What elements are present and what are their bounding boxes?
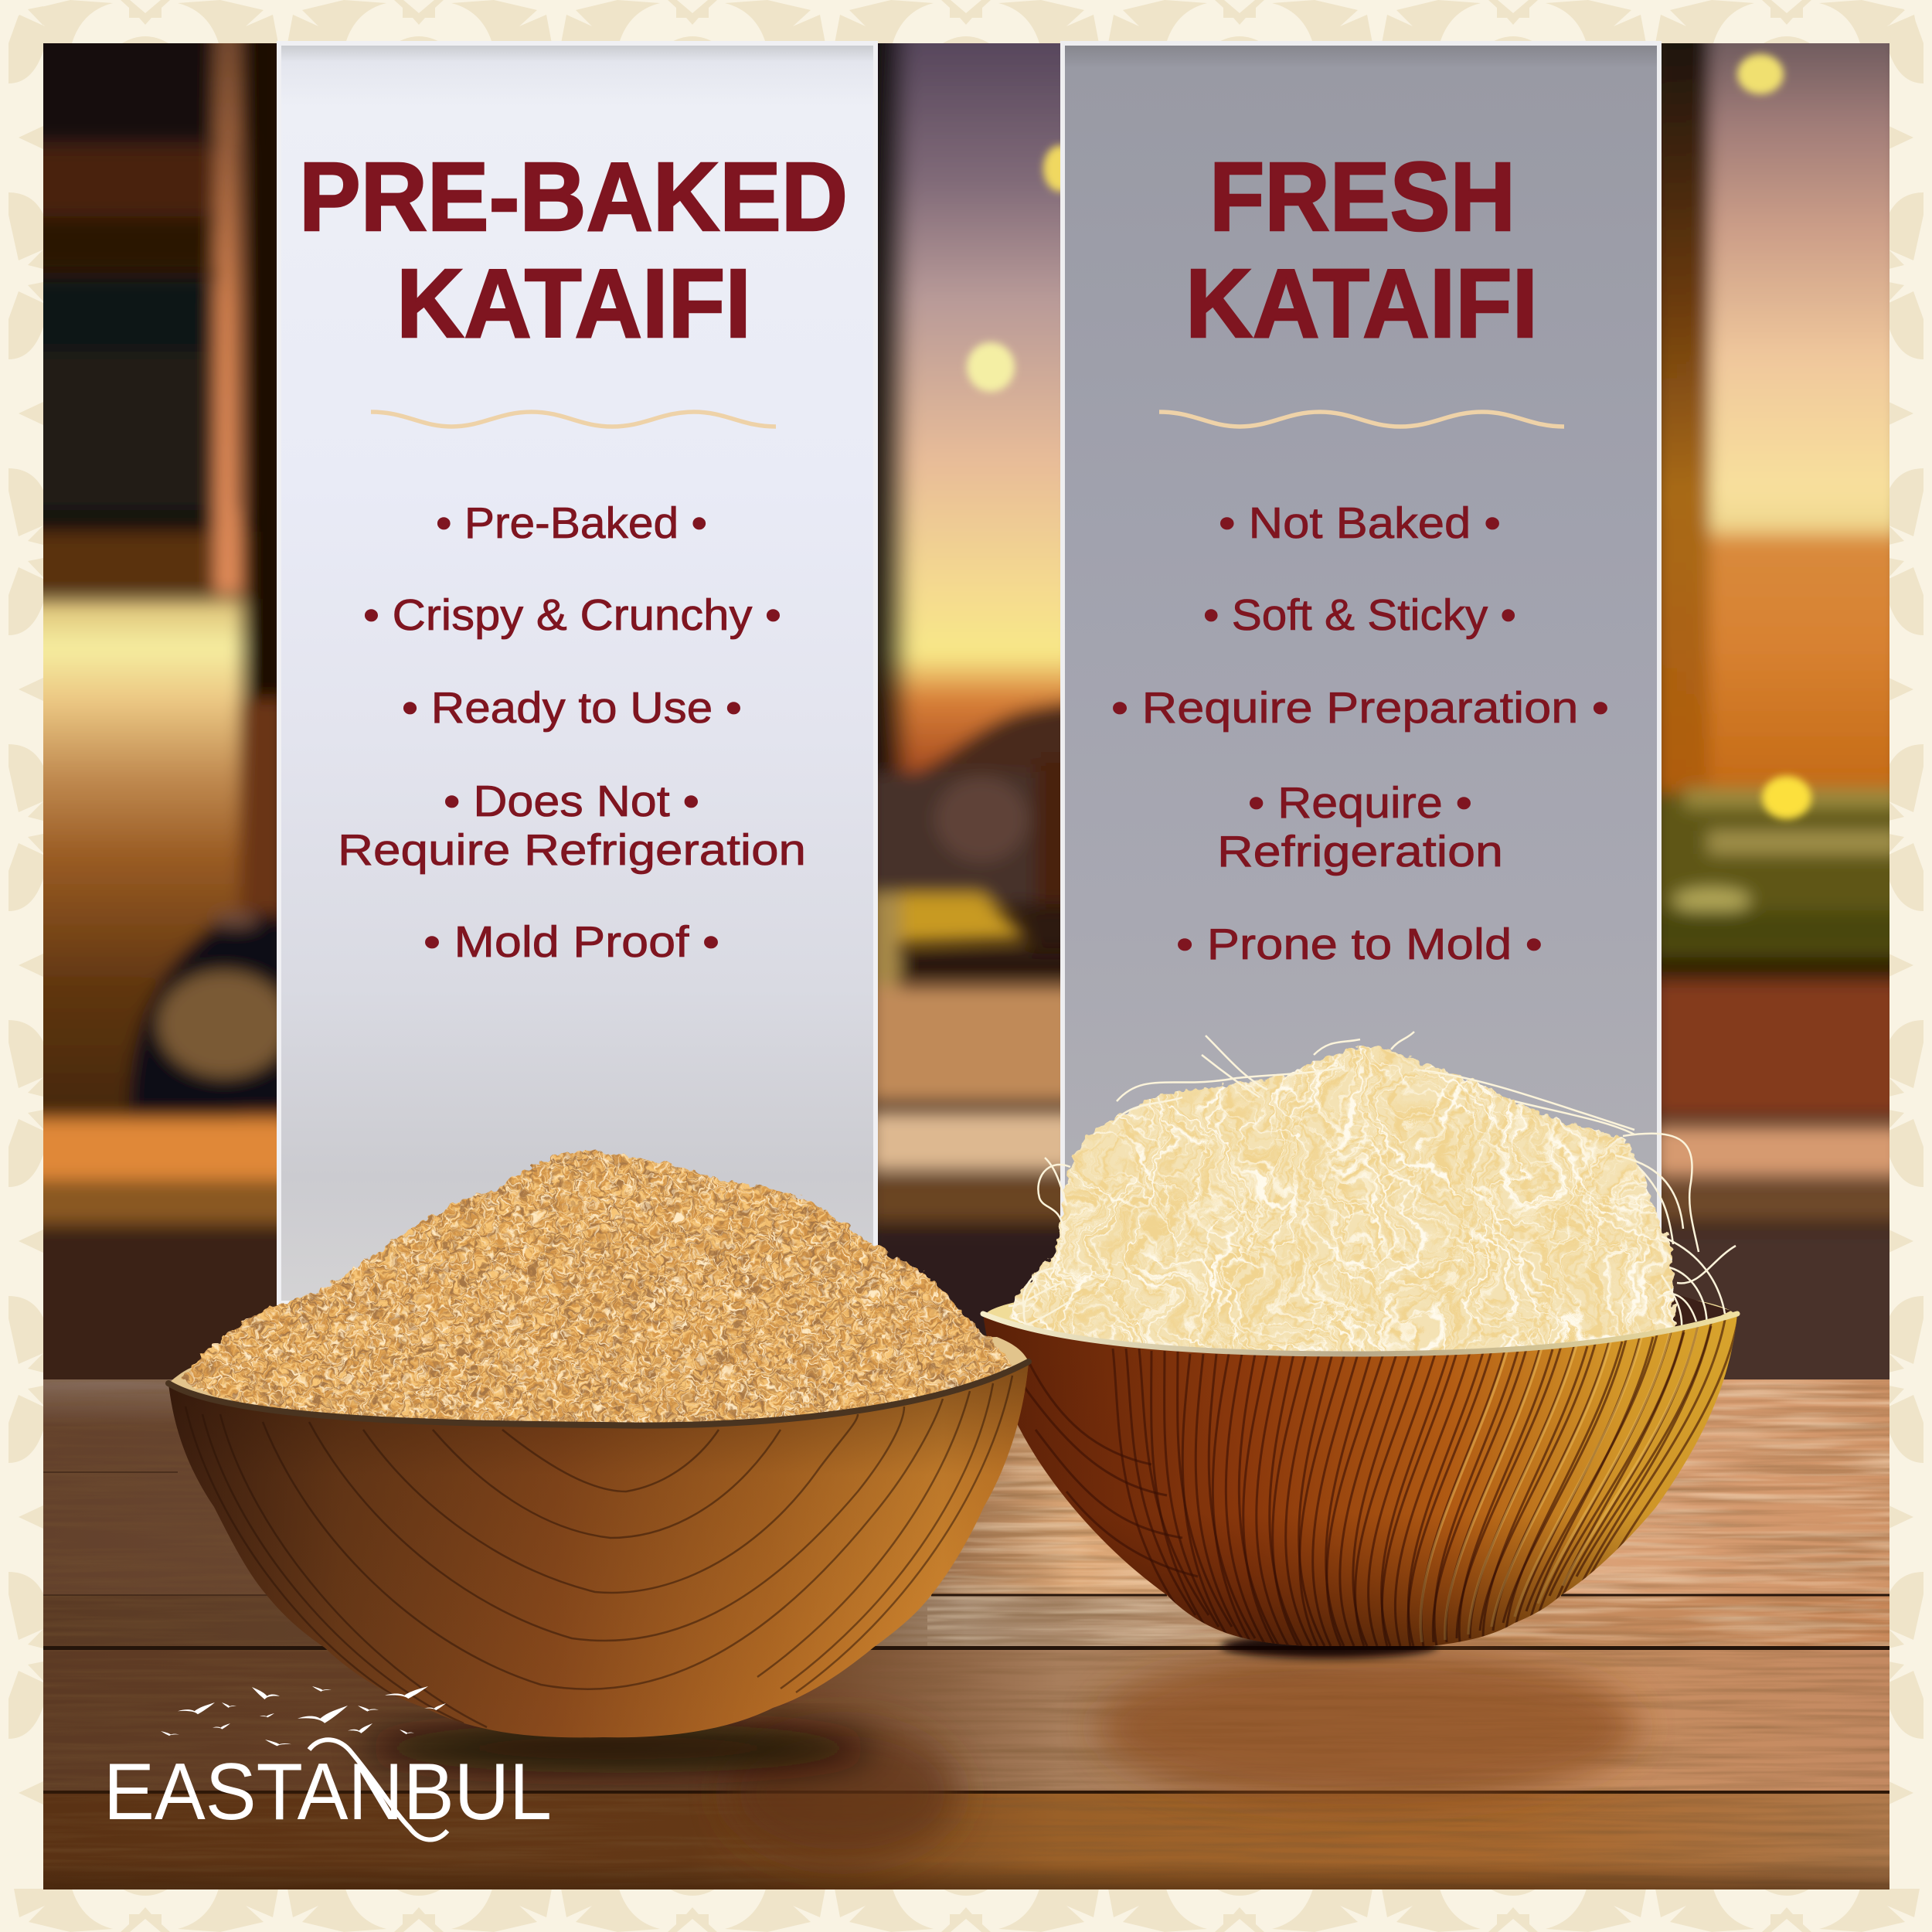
bowl interior rim <box>168 1337 1029 1424</box>
logo: Eastanbul <box>104 1686 552 1840</box>
pre-baked kataifi pile <box>0 662 1226 1904</box>
right bowl with fresh kataifi <box>980 1031 1740 1646</box>
heading: pre-baked kataifi: PRE-BAKED <box>299 142 848 251</box>
heading: fresh kataifi <box>1185 142 1538 358</box>
list: fresh features <box>1111 498 1609 969</box>
bowl body <box>983 1314 1738 1646</box>
list: fresh features: • Require Preparation • <box>1111 683 1609 733</box>
wavy divider <box>1159 412 1564 427</box>
list: fresh features: • Prone to Mold • <box>1176 920 1543 969</box>
list: fresh features: • Soft & Sticky • <box>1203 590 1516 640</box>
list: fresh features: Refrigeration <box>1217 827 1503 876</box>
left bowl with pre-baked kataifi <box>165 1150 1032 1737</box>
wavy divider <box>371 412 776 427</box>
bowl rim highlight <box>168 1362 1029 1426</box>
list: pre-baked features: • Ready to Use • <box>402 683 742 733</box>
heading: pre-baked kataifi: KATAIFI <box>396 249 751 358</box>
bowl shadows on table <box>363 1634 1638 1862</box>
heading: fresh kataifi: KATAIFI <box>1185 249 1538 358</box>
list: pre-baked features: • Mold Proof • <box>423 917 719 967</box>
fresh kataifi noodles <box>1009 1031 1736 1351</box>
list: pre-baked features <box>338 498 806 967</box>
bowl body <box>168 1362 1029 1737</box>
list: pre-baked features: • Crispy & Crunchy • <box>363 590 781 640</box>
wooden table <box>43 1379 1889 1893</box>
heading: fresh kataifi: FRESH <box>1209 142 1515 251</box>
list: fresh features: • Not Baked • <box>1219 498 1501 548</box>
panel: fresh kataifi <box>1063 43 1659 1287</box>
blurred kitchen background <box>15 15 1905 1399</box>
birds <box>161 1686 446 1746</box>
swash <box>309 1740 447 1840</box>
wordmark: EASTANBUL <box>104 1747 552 1837</box>
list: pre-baked features: • Does Not • <box>444 777 699 826</box>
list: pre-baked features: Require Refrigeration <box>338 825 806 875</box>
heading: pre-baked kataifi <box>299 142 848 358</box>
bowl rim highlight <box>983 1314 1737 1354</box>
bowl interior <box>985 1280 1736 1354</box>
list: fresh features: • Require • <box>1248 778 1472 828</box>
panel: pre-baked kataifi <box>279 43 876 1303</box>
list: pre-baked features: • Pre-Baked • <box>436 498 707 548</box>
bokeh lights <box>967 54 1811 819</box>
